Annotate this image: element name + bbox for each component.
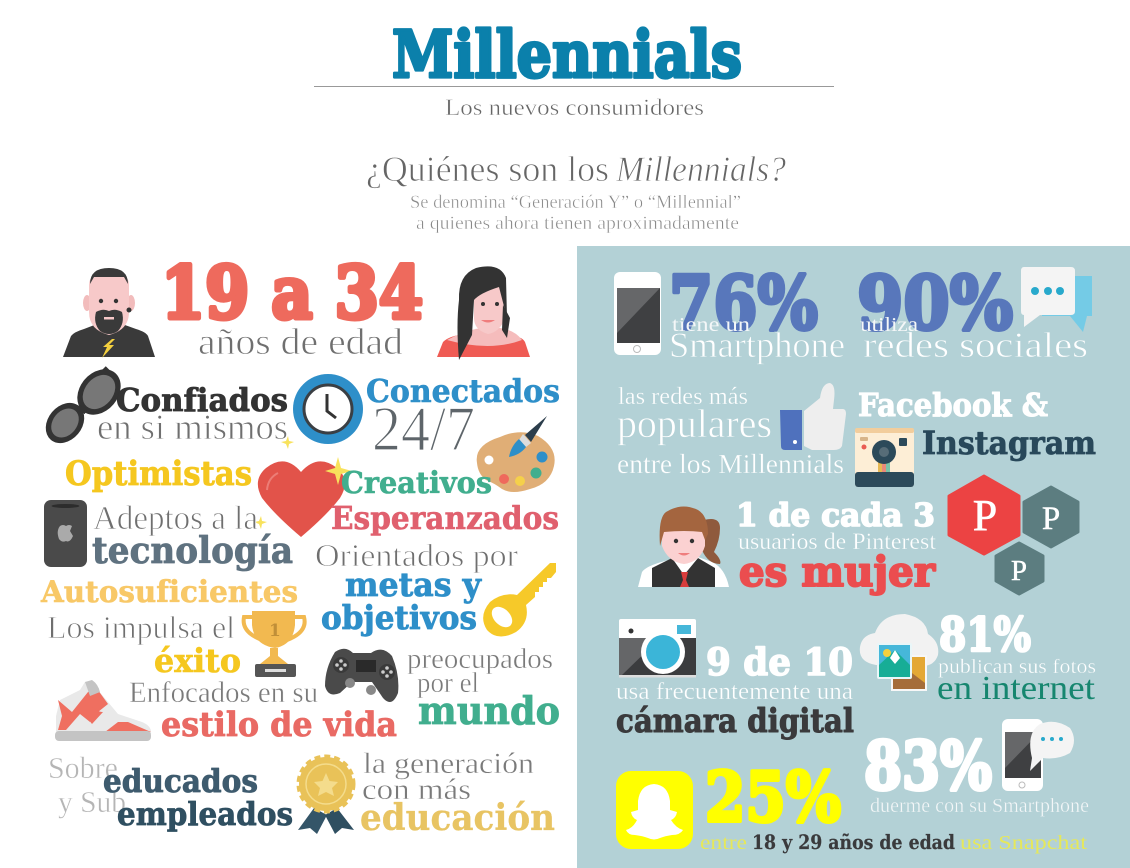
panel: statistics <box>577 246 1130 868</box>
empleados: empleados <box>117 795 293 833</box>
icon: sneaker <box>55 680 151 741</box>
icon: thumbs up <box>780 383 846 450</box>
metas y: metas y <box>345 565 482 604</box>
icon: chat bubbles <box>1021 267 1092 332</box>
Creativos: Creativos <box>341 466 492 501</box>
Smartphone: Smartphone <box>669 325 845 365</box>
Autosuficientes: Autosuficientes <box>40 575 298 610</box>
24/7: 24/7 <box>372 393 475 464</box>
preocupados: preocupados <box>407 644 553 675</box>
9 de 10: 9 de 10 <box>706 640 853 684</box>
Optimistas: Optimistas <box>65 454 252 494</box>
Adeptos a la: Adeptos a la <box>93 500 258 537</box>
icon: heart <box>258 461 345 537</box>
usa frecuentemente una: usa frecuentemente una <box>616 679 853 705</box>
question heading <box>366 149 786 189</box>
Sobre y Sub: y Sub <box>58 784 126 819</box>
icon: woman <box>437 266 530 360</box>
age line <box>700 830 1088 854</box>
Instagram: Instagram <box>922 424 1096 462</box>
header <box>314 17 834 234</box>
panel: characteristics <box>38 250 560 839</box>
25%: 25% <box>705 758 841 838</box>
age line: entre <box>700 832 747 854</box>
tiene un: tiene un <box>672 314 750 336</box>
icon: Pinterest hexagons: P <box>1011 555 1027 587</box>
con más: con más <box>362 773 471 806</box>
age line: 18 y 29 años de edad <box>752 830 955 854</box>
por el: por el <box>417 668 479 699</box>
las redes más: las redes más <box>618 384 748 410</box>
subtitle: Los nuevos consumidores <box>445 95 704 120</box>
age label: años de edad <box>198 322 404 363</box>
Sobre y Sub: Sobre <box>48 750 118 785</box>
es mujer: es mujer <box>739 548 936 596</box>
question heading: ¿Quiénes son los <box>366 149 609 189</box>
cámara digital: cámara digital <box>616 701 854 740</box>
intro text: Se denomina “Generación Y” o “Millennial” <box>410 192 741 213</box>
Facebook &: Facebook & <box>858 386 1048 424</box>
Sobre y Sub <box>48 750 126 819</box>
icon: Snapchat <box>616 771 693 849</box>
icon: Pinterest hexagons <box>949 476 1078 594</box>
en internet: en internet <box>937 670 1096 707</box>
Enfocados en su: Enfocados en su <box>129 676 318 709</box>
icon: smartphone <box>614 272 661 355</box>
81%: 81% <box>939 608 1031 663</box>
Esperanzados: Esperanzados <box>331 499 559 537</box>
utiliza: utiliza <box>860 314 918 336</box>
icon: Mac Pro <box>44 500 87 567</box>
intro text: a quienes ahora tienen aproximadamente <box>416 213 739 234</box>
intro text <box>410 192 741 234</box>
icon: phone with bubble <box>1002 719 1074 791</box>
populares: populares <box>617 401 772 446</box>
83%: 83% <box>864 727 992 805</box>
icon: trophy: 1 <box>269 621 281 641</box>
objetivos: objetivos <box>321 598 477 637</box>
en si mismos: en si mismos <box>97 407 288 447</box>
1 de cada 3: 1 de cada 3 <box>736 496 935 534</box>
Confiados: Confiados <box>116 381 288 419</box>
publican sus fotos: publican sus fotos <box>938 656 1096 678</box>
usuarios de Pinterest: usuarios de Pinterest <box>738 529 937 554</box>
la generación: la generación <box>363 747 534 780</box>
Orientados por: Orientados por <box>315 537 518 573</box>
icon: palette <box>477 416 555 492</box>
icon: clock <box>293 374 363 444</box>
title: Millennials <box>392 17 742 93</box>
educación: educación <box>360 797 555 839</box>
sparkles <box>254 436 352 529</box>
tecnología: tecnología <box>92 530 293 572</box>
estilo de vida: estilo de vida <box>161 705 397 745</box>
90%: 90% <box>857 261 1013 347</box>
redes sociales: redes sociales <box>863 325 1088 365</box>
icon: sunglasses <box>38 361 130 451</box>
icon: key <box>483 563 556 637</box>
icon: trophy <box>244 611 305 677</box>
question heading: Millennials? <box>615 149 786 189</box>
icon: game controller <box>325 649 398 702</box>
age range: 19 a 34 <box>161 250 423 335</box>
icon: cloud with photos <box>860 614 938 691</box>
duerme con su Smartphone: duerme con su Smartphone <box>870 795 1089 817</box>
éxito: éxito <box>154 641 241 680</box>
icon: Pinterest hexagons: P <box>973 491 997 540</box>
icon: bearded man <box>63 268 155 358</box>
icon: woman in vest <box>638 506 729 587</box>
educados: educados <box>103 762 258 800</box>
age line: usa Snapchat <box>960 832 1088 854</box>
Los impulsa el: Los impulsa el <box>47 609 235 645</box>
entre los Millennials: entre los Millennials <box>617 449 844 479</box>
icon: camera <box>619 619 696 678</box>
Conectados: Conectados <box>366 372 560 410</box>
76%: 76% <box>669 261 818 347</box>
mundo: mundo <box>418 688 560 733</box>
icon: medal <box>298 756 354 834</box>
icon: Instagram camera <box>855 428 914 487</box>
icon: Pinterest hexagons: P <box>1042 501 1060 537</box>
